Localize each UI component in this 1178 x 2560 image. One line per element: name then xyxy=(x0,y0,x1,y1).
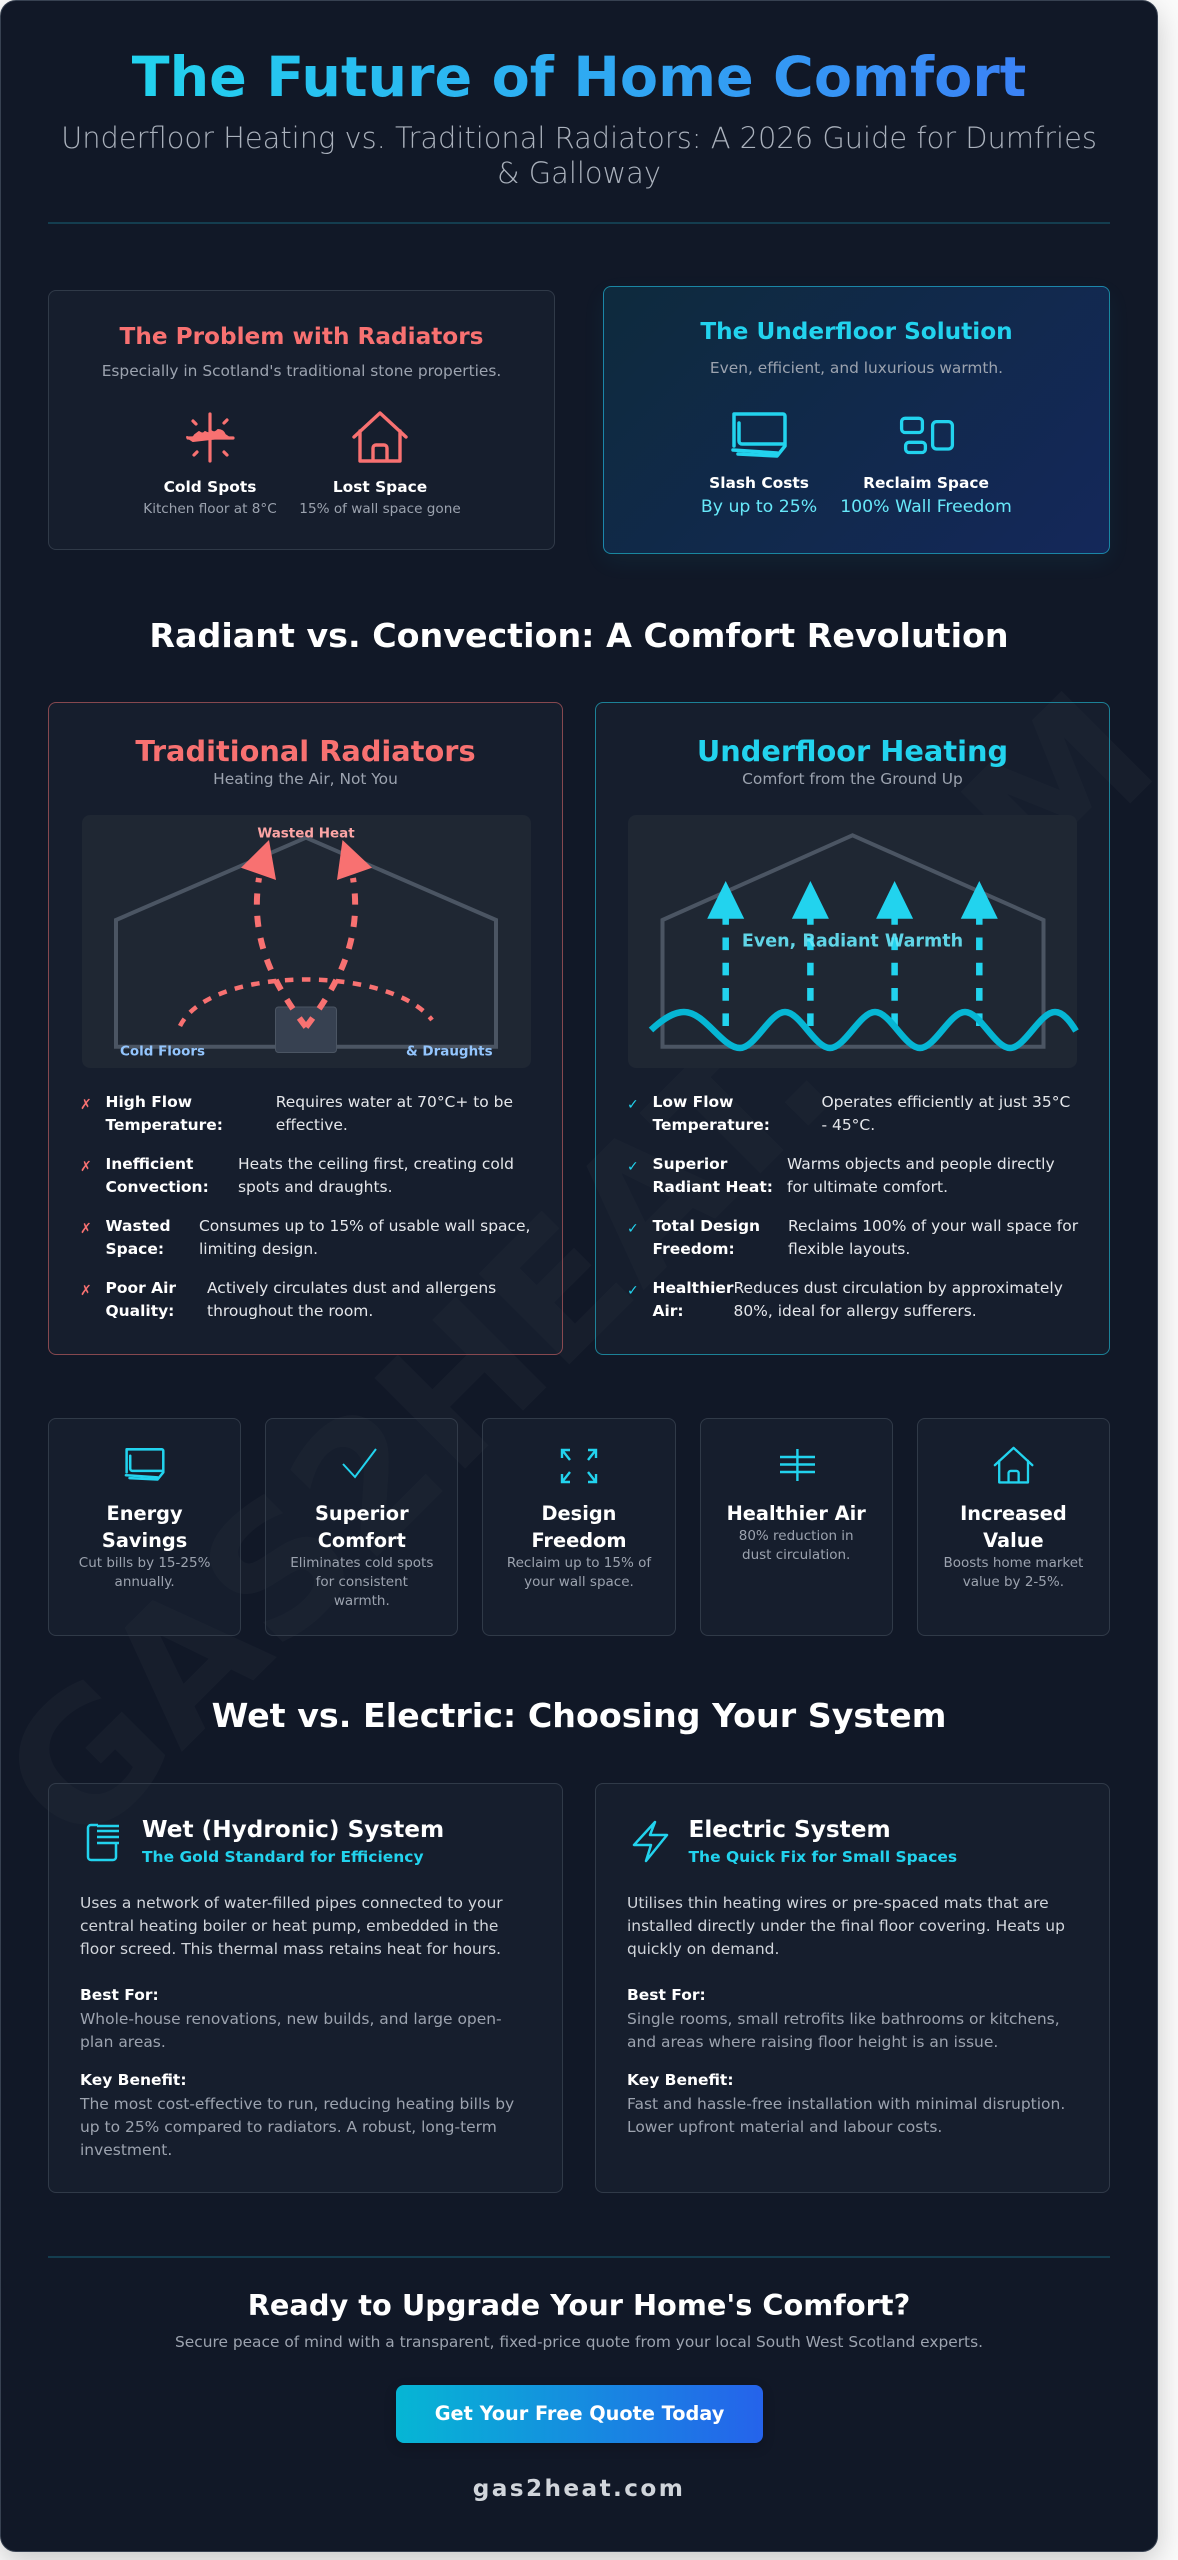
label: cold spots: Cold Spots xyxy=(164,478,256,496)
title: design freedom: Design xyxy=(542,1502,616,1525)
text: energy savings detail: annually. xyxy=(115,1574,175,1590)
title: increased value xyxy=(960,1502,1067,1552)
heading: underfloor heating: Underfloor Heating xyxy=(697,734,1008,768)
text: solution subtitle: Even, efficient, and luxurious warmth. xyxy=(710,358,1003,376)
label: best for: Best For: xyxy=(80,1986,159,2004)
list item: low flow temperature: ✓ xyxy=(627,1096,639,1112)
text: key benefit detail xyxy=(627,2094,1065,2136)
title: superior comfort: Comfort xyxy=(318,1529,406,1552)
text: best for detail: plan areas. xyxy=(80,2033,166,2051)
label: draughts: & Draughts xyxy=(406,1044,493,1060)
subtitle: Underfloor Heating vs. Traditional Radiators: A 2026 Guide for Dumfries xyxy=(61,121,1097,155)
list item: poor air quality: throughout the room. xyxy=(207,1302,373,1320)
house outline xyxy=(662,835,1044,1047)
list item: total design freedom: Freedom: xyxy=(652,1240,735,1258)
text: key benefit detail: Fast and hassle-free installation with minimal disruption. xyxy=(627,2094,1065,2112)
heading: traditional radiators: Traditional Radiators xyxy=(135,734,476,768)
icon: slash costs xyxy=(731,412,787,458)
panel: underfloor heating xyxy=(595,702,1110,1355)
icon: expand arrows xyxy=(560,1448,598,1484)
text: healthier air detail: dust circulation. xyxy=(742,1547,850,1563)
text: best for detail xyxy=(627,2010,1060,2051)
text: key benefit detail: Lower upfront material and labour costs. xyxy=(627,2118,942,2136)
list item: wasted space: ✗ xyxy=(80,1220,92,1236)
text: wet system description xyxy=(80,1894,503,1958)
right heat flow xyxy=(306,878,355,1027)
text: best for detail xyxy=(80,2010,502,2051)
subtitle: & Galloway xyxy=(497,156,661,190)
text: call to action subtitle: Secure peace of mind with a transparent, fixed-price quote from your local South West Scotland experts. xyxy=(175,2333,983,2351)
label: cold floors: Cold Floors xyxy=(120,1044,205,1060)
label: slash costs: Slash Costs xyxy=(709,474,809,492)
panel: wet hydronic system xyxy=(48,1783,563,2193)
text: healthier air detail xyxy=(739,1528,854,1563)
title: increased value: Value xyxy=(983,1529,1044,1552)
left heat flow xyxy=(257,878,306,1027)
radiant lines xyxy=(726,918,979,1026)
list item: low flow temperature: Low Flow xyxy=(652,1092,733,1110)
diagram: radiant underfloor xyxy=(628,815,1077,1068)
text: superior comfort detail: for consistent xyxy=(316,1574,408,1590)
text: wet system description: central heating boiler or heat pump, embedded in the xyxy=(80,1917,498,1935)
heading: solution: The Underfloor Solution xyxy=(700,318,1013,345)
title: wet system: Wet (Hydronic) System xyxy=(142,1816,444,1843)
list item: high flow temperature: ✗ xyxy=(80,1096,92,1112)
text: key benefit detail: The most cost-effective to run, reducing heating bills by xyxy=(80,2094,514,2112)
text: electric system description: Utilises thin heating wires or pre-spaced mats that are xyxy=(627,1894,1049,1912)
list item: total design freedom: Total Design xyxy=(652,1216,760,1234)
label: even radiant warmth: Even, Radiant Warmth xyxy=(742,932,963,952)
text: underfloor subtitle: Comfort from the Ground Up xyxy=(742,770,963,788)
list item: poor air quality: Quality: xyxy=(106,1302,174,1320)
icon: reclaim space xyxy=(900,416,954,454)
list item: poor air quality xyxy=(80,1278,496,1320)
list item: inefficient convection: Inefficient xyxy=(106,1154,193,1172)
title: design freedom xyxy=(531,1502,626,1552)
text: electric system description: quickly on demand. xyxy=(627,1940,779,1958)
heading: wet vs electric: Wet vs. Electric: Choosing Your System xyxy=(212,1696,946,1735)
list item: high flow temperature: effective. xyxy=(276,1116,348,1134)
label: reclaim space: Reclaim Space xyxy=(863,474,989,492)
card: design freedom xyxy=(482,1418,676,1636)
brand: website: gas2heat.com xyxy=(473,2475,685,2502)
icon: lightning bolt xyxy=(632,1820,668,1862)
text: key benefit detail: investment. xyxy=(80,2141,172,2159)
list item: inefficient convection: spots and draughts. xyxy=(238,1178,393,1196)
list item: wasted space: Wasted xyxy=(106,1216,171,1234)
list item: healthier air xyxy=(627,1278,1063,1320)
subtitle xyxy=(61,121,1097,190)
arrow heads xyxy=(707,881,998,919)
list item: wasted space: Space: xyxy=(106,1240,164,1258)
text: key benefit detail xyxy=(80,2094,514,2159)
text: wet system description: Uses a network of water-filled pipes connected to your xyxy=(80,1894,503,1912)
list item: healthier air: ✓ xyxy=(627,1282,639,1298)
house outline xyxy=(116,838,496,1047)
list item: total design freedom: Reclaims 100% of your wall space for xyxy=(788,1216,1078,1234)
card: healthier air xyxy=(700,1418,893,1636)
title: energy savings: Energy xyxy=(107,1502,183,1525)
label: wasted heat: Wasted Heat xyxy=(257,826,355,842)
convection arc xyxy=(180,979,432,1026)
card: superior comfort xyxy=(265,1418,458,1636)
list item: poor air quality: ✗ xyxy=(80,1282,92,1298)
text: increased value detail: value by 2-5%. xyxy=(963,1574,1064,1590)
button: free quote: Get Your Free Quote Today xyxy=(435,2402,724,2425)
list item: poor air quality: Poor Air xyxy=(106,1278,176,1296)
list item: high flow temperature: High Flow xyxy=(106,1092,192,1110)
text: slash costs detail: By up to 25% xyxy=(701,497,817,517)
list item: inefficient convection: Heats the ceiling first, creating cold xyxy=(238,1154,514,1172)
text: design freedom detail xyxy=(507,1555,652,1590)
text: design freedom detail: Reclaim up to 15% of xyxy=(507,1555,651,1571)
icon: lost space house xyxy=(352,411,408,463)
icon: house value xyxy=(994,1446,1034,1484)
panel: traditional radiators xyxy=(48,702,563,1355)
list item: inefficient convection: ✗ xyxy=(80,1158,92,1174)
diagram: radiator convection xyxy=(82,815,531,1068)
list item: total design freedom xyxy=(627,1216,1078,1258)
label: key benefit: Key Benefit: xyxy=(80,2070,187,2088)
list item: total design freedom: ✓ xyxy=(627,1220,639,1236)
list item: inefficient convection: Convection: xyxy=(106,1178,209,1196)
text: superior comfort detail xyxy=(290,1555,433,1609)
panel: the problem with radiators xyxy=(48,290,555,550)
label: key benefit: Key Benefit: xyxy=(627,2070,734,2088)
icon: cold spots xyxy=(186,412,235,463)
list item: superior radiant heat: for ultimate comfort. xyxy=(787,1178,948,1196)
text: problem subtitle: Especially in Scotland's traditional stone properties. xyxy=(102,362,501,380)
title: increased value: Increased xyxy=(960,1502,1067,1525)
panel: electric system xyxy=(595,1783,1110,2193)
list item: healthier air: Reduces dust circulation by approximately xyxy=(734,1278,1063,1296)
list item: low flow temperature: Operates efficiently at just 35°C xyxy=(822,1092,1070,1110)
subtitle: electric system: The Quick Fix for Small Spaces xyxy=(688,1848,957,1866)
subtitle: wet system: The Gold Standard for Efficiency xyxy=(142,1848,424,1866)
text: traditional subtitle: Heating the Air, Not You xyxy=(213,770,398,788)
title: The Future of Home Comfort xyxy=(132,45,1026,110)
text: best for detail: and areas where raising floor height is an issue. xyxy=(627,2033,998,2051)
text: best for detail: Single rooms, small retrofits like bathrooms or kitchens, xyxy=(627,2010,1060,2028)
text: electric system description: installed directly under the final floor covering. Heats up xyxy=(627,1917,1065,1935)
heading: call to action: Ready to Upgrade Your Home's Comfort? xyxy=(248,2288,910,2322)
label: best for: Best For: xyxy=(627,1986,706,2004)
list item: low flow temperature: Temperature: xyxy=(652,1116,770,1134)
list item: superior radiant heat: ✓ xyxy=(627,1158,639,1174)
radiator xyxy=(276,1007,336,1052)
text: best for detail: Whole-house renovations, new builds, and large open- xyxy=(80,2010,502,2028)
title: energy savings xyxy=(102,1502,187,1552)
text: increased value detail: Boosts home market xyxy=(943,1555,1083,1571)
title: design freedom: Freedom xyxy=(531,1529,626,1552)
text: key benefit detail: up to 25% compared to radiators. A robust, long-term xyxy=(80,2118,497,2136)
list item: superior radiant heat: Warms objects and people directly xyxy=(787,1154,1055,1172)
button: free quote xyxy=(396,2385,763,2443)
list item: total design freedom: flexible layouts. xyxy=(788,1240,910,1258)
list item: wasted space xyxy=(80,1216,530,1258)
list item: low flow temperature: - 45°C. xyxy=(822,1116,875,1134)
list item: wasted space: Consumes up to 15% of usable wall space, xyxy=(199,1216,530,1234)
heating pipe wave xyxy=(651,1012,1076,1048)
list item: superior radiant heat: Radiant Heat: xyxy=(652,1178,773,1196)
list item: high flow temperature: Temperature: xyxy=(106,1116,223,1134)
text: superior comfort detail: warmth. xyxy=(334,1593,390,1609)
list item: healthier air: 80%, ideal for allergy sufferers. xyxy=(734,1302,977,1320)
icon: energy savings xyxy=(124,1448,165,1481)
text: energy savings detail xyxy=(79,1555,210,1590)
label: lost space: Lost Space xyxy=(333,478,427,496)
title: electric system: Electric System xyxy=(688,1816,891,1843)
text: design freedom detail: your wall space. xyxy=(524,1574,634,1590)
icon: check mark xyxy=(342,1448,377,1478)
list item: high flow temperature xyxy=(80,1092,513,1134)
list item: superior radiant heat: Superior xyxy=(652,1154,727,1172)
title: healthier air: Healthier Air xyxy=(727,1502,866,1525)
card: increased value xyxy=(917,1418,1110,1636)
text: superior comfort detail: Eliminates cold spots xyxy=(290,1555,433,1571)
text: healthier air detail: 80% reduction in xyxy=(739,1528,854,1544)
icon: air filter lines xyxy=(780,1449,815,1481)
list item: wasted space: limiting design. xyxy=(199,1240,318,1258)
card: energy savings xyxy=(48,1418,241,1636)
text: wet system description: floor screed. This thermal mass retains heat for hours. xyxy=(80,1940,501,1958)
heading: problem: The Problem with Radiators xyxy=(120,323,483,350)
list item: healthier air: Healthier xyxy=(652,1278,734,1296)
text: lost space detail: 15% of wall space gone xyxy=(299,501,461,517)
text: energy savings detail: Cut bills by 15-25% xyxy=(79,1555,210,1571)
list item: high flow temperature: Requires water at 70°C+ to be xyxy=(276,1092,513,1110)
text: cold spots detail: Kitchen floor at 8°C xyxy=(143,501,277,517)
left arrow head xyxy=(241,840,276,880)
text: electric system description xyxy=(627,1894,1065,1958)
list item: superior radiant heat xyxy=(627,1154,1055,1196)
list item: poor air quality: Actively circulates dust and allergens xyxy=(207,1278,496,1296)
icon: hydronic manifold xyxy=(86,1824,119,1862)
title: energy savings: Savings xyxy=(102,1529,187,1552)
panel: the underfloor solution xyxy=(603,286,1110,554)
heading: radiant vs convection: Radiant vs. Convection: A Comfort Revolution xyxy=(149,616,1009,655)
list item: low flow temperature xyxy=(627,1092,1070,1134)
list item: inefficient convection xyxy=(80,1154,514,1196)
list item: healthier air: Air: xyxy=(652,1302,684,1320)
right arrow head xyxy=(337,840,372,880)
title: superior comfort: Superior xyxy=(315,1502,409,1525)
title: superior comfort xyxy=(315,1502,409,1552)
text: increased value detail xyxy=(943,1555,1083,1590)
text: reclaim space detail: 100% Wall Freedom xyxy=(840,497,1012,517)
